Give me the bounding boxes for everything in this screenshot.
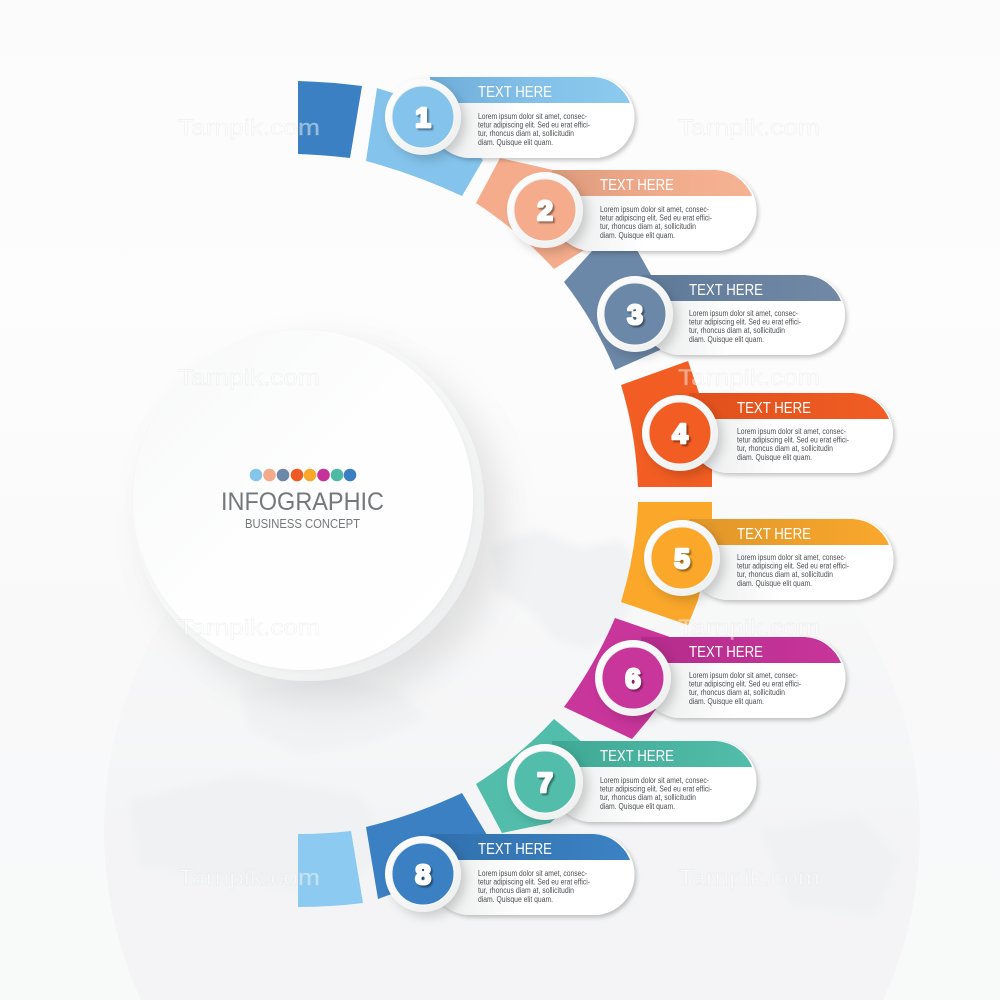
- watermarks: Tarnpik.com: [178, 615, 320, 640]
- badge center: [651, 527, 713, 589]
- body text: [689, 671, 801, 706]
- watermarks: Tarnpik.com: [678, 615, 820, 640]
- watermarks: Tarnpik.com: [178, 115, 320, 140]
- watermarks: Tarnpik.com: [178, 865, 320, 890]
- title: TEXT HERE: [737, 400, 811, 417]
- body text: tur, rhoncus diam at, sollicitudin: [689, 688, 785, 697]
- badge ring: [595, 640, 671, 716]
- arc segment 5: [621, 502, 712, 625]
- card body: [430, 77, 634, 158]
- body text: tetur adipiscing elit. Sed eu erat effici-: [689, 318, 801, 327]
- body text: tur, rhoncus diam at, sollicitudin: [478, 129, 574, 138]
- number: 6: [625, 663, 641, 694]
- card header: [552, 170, 752, 196]
- badge center: [602, 647, 664, 709]
- card header: [641, 275, 841, 301]
- card header: [430, 834, 630, 860]
- body text: diam. Quisque elit quam.: [689, 697, 764, 706]
- watermarks: Tarnpik.com: [678, 865, 820, 890]
- number: 2: [537, 195, 553, 226]
- watermarks: Tarnpik.com: [678, 365, 820, 390]
- body text: tur, rhoncus diam at, sollicitudin: [737, 570, 833, 579]
- panel: step 6: [595, 637, 846, 718]
- body text: tetur adipiscing elit. Sed eu erat effici-: [689, 680, 801, 689]
- arc segment 4: [621, 361, 712, 487]
- body text: tetur adipiscing elit. Sed eu erat effici-: [737, 436, 849, 445]
- badge ring: [644, 520, 720, 596]
- watermarks: [178, 115, 820, 890]
- center circle plate: [132, 329, 484, 681]
- body text: diam. Quisque elit quam.: [737, 579, 812, 588]
- title: TEXT HERE: [600, 748, 674, 765]
- body text: tur, rhoncus diam at, sollicitudin: [600, 793, 696, 802]
- body text: Lorem ipsum dolor sit amet, consec-: [478, 869, 587, 878]
- body text: Lorem ipsum dolor sit amet, consec-: [737, 427, 846, 436]
- body text: Lorem ipsum dolor sit amet, consec-: [689, 671, 798, 680]
- panel: step 1: [385, 77, 634, 158]
- title: TEXT HERE: [689, 644, 763, 661]
- arc segment 6: [564, 618, 670, 739]
- title: TEXT HERE: [689, 282, 763, 299]
- title: TEXT HERE: [478, 841, 552, 858]
- card body: [640, 637, 846, 718]
- arc segment 2: [476, 158, 600, 269]
- arc segment: bottom end cap: [298, 831, 363, 907]
- number: 3: [627, 299, 643, 330]
- number: 8: [415, 859, 431, 890]
- heading: INFOGRAPHIC: [221, 488, 384, 516]
- body text: [478, 869, 590, 904]
- number: 4: [672, 418, 688, 449]
- arc segment 3: [564, 250, 665, 370]
- badge ring: [642, 395, 718, 471]
- card body: [552, 170, 756, 251]
- card body: [430, 834, 634, 915]
- body text: Lorem ipsum dolor sit amet, consec-: [600, 776, 709, 785]
- body text: tur, rhoncus diam at, sollicitudin: [600, 222, 696, 231]
- watermarks: Tarnpik.com: [678, 115, 820, 140]
- badge ring: [597, 276, 673, 352]
- number: 1: [415, 102, 431, 133]
- body text: Lorem ipsum dolor sit amet, consec-: [600, 205, 709, 214]
- title: TEXT HERE: [737, 526, 811, 543]
- card body: [689, 393, 893, 473]
- body text: diam. Quisque elit quam.: [478, 895, 553, 904]
- card header: [689, 393, 889, 419]
- card header: [689, 519, 889, 545]
- body text: [478, 112, 590, 147]
- body text: tetur adipiscing elit. Sed eu erat effici-: [600, 214, 712, 223]
- number: 7: [537, 767, 553, 798]
- badge center: [514, 179, 576, 241]
- body text: Lorem ipsum dolor sit amet, consec-: [689, 309, 798, 318]
- card header: [552, 741, 752, 767]
- number: 5: [674, 543, 690, 574]
- body text: tetur adipiscing elit. Sed eu erat effici-: [478, 121, 590, 130]
- body text: tur, rhoncus diam at, sollicitudin: [478, 886, 574, 895]
- body text: diam. Quisque elit quam.: [600, 802, 675, 811]
- badge center: [649, 402, 711, 464]
- panel: step 8: [385, 834, 634, 915]
- body text: [737, 427, 849, 462]
- background globe with faint world map: [104, 422, 920, 1000]
- body text: [600, 776, 712, 811]
- panel: step 7: [507, 741, 756, 822]
- watermarks: Tarnpik.com: [178, 365, 320, 390]
- body text: tetur adipiscing elit. Sed eu erat effici-: [737, 562, 849, 571]
- card header: [430, 77, 630, 103]
- center circle inner face: [133, 330, 473, 670]
- subheading: BUSINESS CONCEPT: [245, 517, 360, 531]
- card body: [641, 275, 845, 355]
- badge ring: [385, 79, 461, 155]
- body text: tur, rhoncus diam at, sollicitudin: [689, 326, 785, 335]
- arc segment 7: [476, 719, 590, 833]
- panel: center circle: [132, 329, 484, 681]
- body text: [689, 309, 801, 344]
- body text: tur, rhoncus diam at, sollicitudin: [737, 444, 833, 453]
- badge ring: [507, 172, 583, 248]
- badge center: [514, 751, 576, 813]
- body text: tetur adipiscing elit. Sed eu erat effici-: [478, 878, 590, 887]
- badge ring: [507, 744, 583, 820]
- arc segment 8: [366, 793, 487, 899]
- arc segment: top end cap: [298, 81, 362, 158]
- body text: Lorem ipsum dolor sit amet, consec-: [478, 112, 587, 121]
- panel: step 3: [597, 275, 845, 355]
- badge center: [392, 86, 454, 148]
- panel: step 2: [507, 170, 756, 251]
- body text: diam. Quisque elit quam.: [478, 138, 553, 147]
- badge ring: [385, 836, 461, 912]
- body text: [600, 205, 712, 240]
- badge center: [392, 843, 454, 905]
- badge center: [604, 283, 666, 345]
- body text: diam. Quisque elit quam.: [600, 231, 675, 240]
- arc segment 1: [366, 88, 483, 196]
- panel: step 5: [644, 519, 894, 600]
- body text: diam. Quisque elit quam.: [737, 453, 812, 462]
- title: TEXT HERE: [478, 84, 552, 101]
- title: TEXT HERE: [600, 177, 674, 194]
- body text: Lorem ipsum dolor sit amet, consec-: [737, 553, 846, 562]
- card header: [641, 637, 841, 663]
- body text: [737, 553, 849, 588]
- body text: diam. Quisque elit quam.: [689, 335, 764, 344]
- color dots: [250, 469, 356, 481]
- body text: tetur adipiscing elit. Sed eu erat effici-: [600, 785, 712, 794]
- card body: [688, 519, 894, 600]
- card body: [552, 741, 756, 822]
- panel: step 4: [642, 393, 893, 473]
